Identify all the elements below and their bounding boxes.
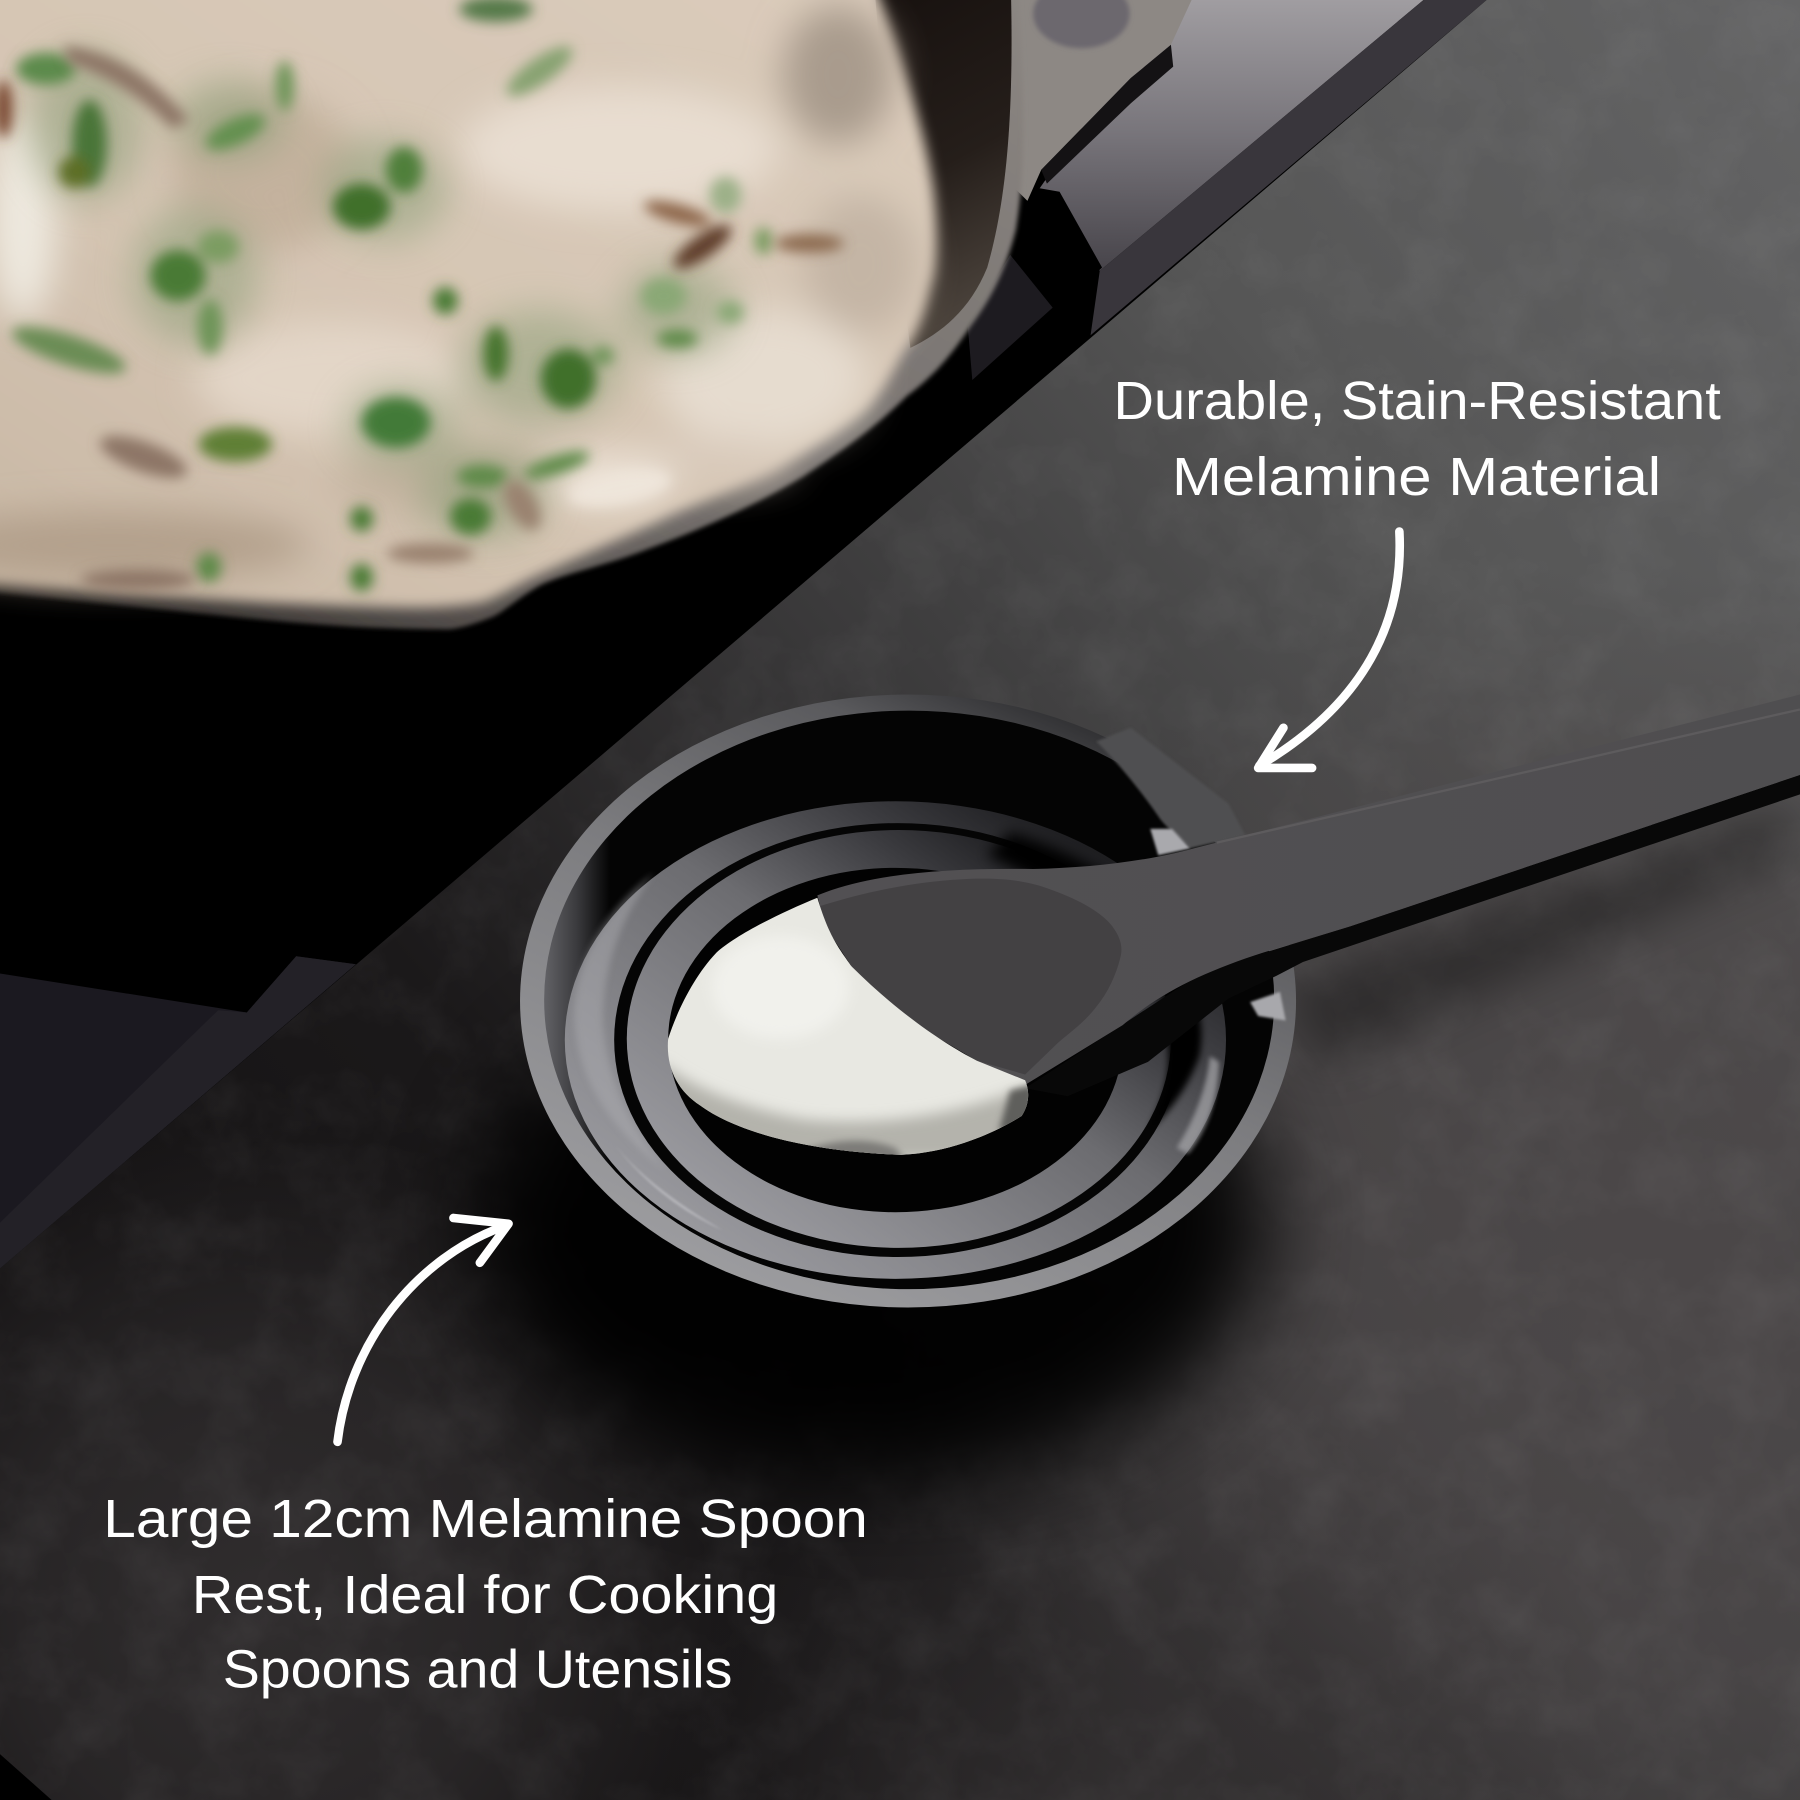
bowl inner wall xyxy=(544,711,1274,1289)
pan inner wall xyxy=(872,0,1012,348)
spoon body xyxy=(817,695,1800,1085)
mat wedge over upper right rim xyxy=(1096,728,1246,848)
callout: size: Rest, Ideal for Cooking xyxy=(192,1565,778,1625)
spoon recess xyxy=(817,879,1121,1074)
mushrooms xyxy=(0,46,844,590)
stovetop panel: upper right xyxy=(1039,0,1487,335)
pan rim xyxy=(0,0,1023,629)
outer glossy ring xyxy=(565,801,1226,1279)
arrow: pointing to spoon material xyxy=(1258,532,1400,768)
panel: cast iron pan with sauce xyxy=(0,0,1192,629)
panel: grey melamine spoon xyxy=(817,695,1800,1085)
bowl outer rim xyxy=(520,695,1296,1308)
handle crease xyxy=(1217,709,1800,843)
dark streak right xyxy=(1148,1018,1205,1128)
panel: black melamine spoon rest bowl xyxy=(520,695,1296,1308)
inner well xyxy=(668,868,1123,1212)
herb halos xyxy=(29,52,735,540)
bowl cast shadow xyxy=(476,964,1268,1481)
black underside of spoon handle xyxy=(1025,775,1800,1096)
sauce underside shading xyxy=(660,1062,1033,1159)
bottom mat tone xyxy=(808,1586,1231,1800)
sauce surface xyxy=(0,0,936,608)
lower left bright gloss xyxy=(631,1164,715,1226)
pan handle xyxy=(987,0,1192,201)
dark groove xyxy=(614,823,1181,1257)
callout: material xyxy=(1114,371,1721,507)
handle cast shadow xyxy=(1280,804,1791,1068)
mottled texture xyxy=(6,654,1768,1792)
dark sheen upper right xyxy=(987,829,1186,1002)
sauce shading xyxy=(0,6,918,580)
white sauce on spoon tip xyxy=(660,898,1033,1162)
spout highlight: right xyxy=(1250,992,1286,1021)
lower left mat tone xyxy=(0,1236,630,1800)
callout: size xyxy=(103,1489,868,1700)
callout: size: Spoons and Utensils xyxy=(223,1640,732,1700)
callout: material: Durable, Stain-Resistant xyxy=(1114,371,1721,431)
herbs xyxy=(7,0,773,591)
lower right lighter mat tone xyxy=(1058,796,1800,1800)
arrow: pointing to spoon rest xyxy=(338,1218,509,1442)
callout: size: Large 12cm Melamine Spoon xyxy=(103,1489,868,1549)
right bright streak xyxy=(1177,1056,1219,1154)
spout highlight: top xyxy=(1150,829,1190,855)
sauce bright area xyxy=(712,936,849,1039)
callout: material: Melamine Material xyxy=(1172,447,1661,507)
ring bright left xyxy=(574,874,652,1152)
inner glossy ring xyxy=(627,830,1171,1248)
stovetop panel: lower left xyxy=(0,956,356,1268)
black pan handle bracket xyxy=(827,187,1102,517)
